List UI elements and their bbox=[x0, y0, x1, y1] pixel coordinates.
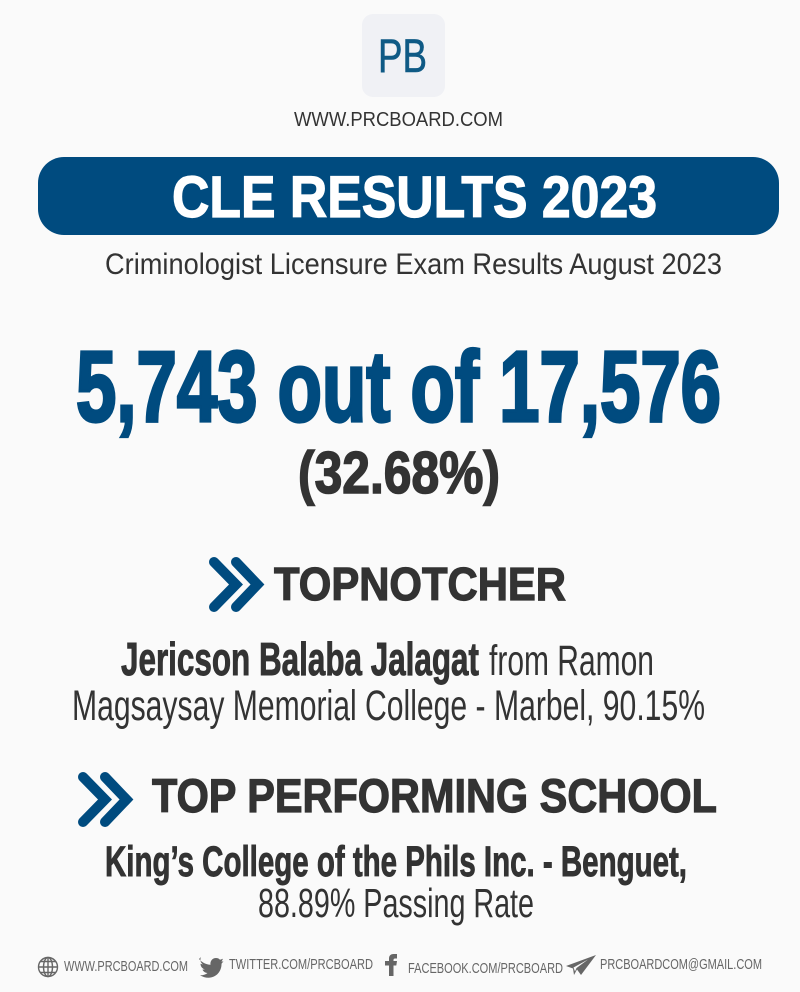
topnotcher details bbox=[72, 633, 705, 730]
top school details: 88.89% Passing Rate bbox=[258, 880, 534, 926]
topnotcher details: Jericson Balaba Jalagat bbox=[121, 633, 479, 685]
subtitle: Criminologist Licensure Exam Results August 2023 bbox=[105, 248, 722, 281]
top school details bbox=[105, 838, 687, 926]
title banner: CLE RESULTS 2023 bbox=[172, 165, 657, 230]
icon: twitter bird bbox=[199, 957, 224, 978]
footer contacts bbox=[38, 954, 762, 978]
title banner bbox=[38, 157, 779, 235]
topnotcher details: from Ramon bbox=[489, 637, 654, 685]
icon: facebook f bbox=[385, 954, 397, 976]
logo: PB: PB bbox=[378, 29, 427, 82]
icon: paper plane bbox=[566, 955, 596, 975]
facebook link: FACEBOOK.COM/PRCBOARD bbox=[408, 961, 563, 977]
passing percentage: (32.68%) bbox=[298, 440, 500, 506]
icon: double chevron topnotcher bbox=[214, 562, 258, 607]
icon: double chevron top school bbox=[83, 777, 126, 822]
website link: WWW.PRCBOARD.COM bbox=[64, 959, 188, 975]
website URL: WWW.PRCBOARD.COM bbox=[294, 109, 503, 131]
twitter link: TWITTER.COM/PRCBOARD bbox=[229, 957, 373, 973]
icon: globe bbox=[38, 958, 58, 976]
heading: top performing school: TOP PERFORMING SCHOOL bbox=[152, 769, 717, 822]
heading: topnotcher: TOPNOTCHER bbox=[274, 558, 566, 610]
logo: PB bbox=[362, 14, 445, 97]
